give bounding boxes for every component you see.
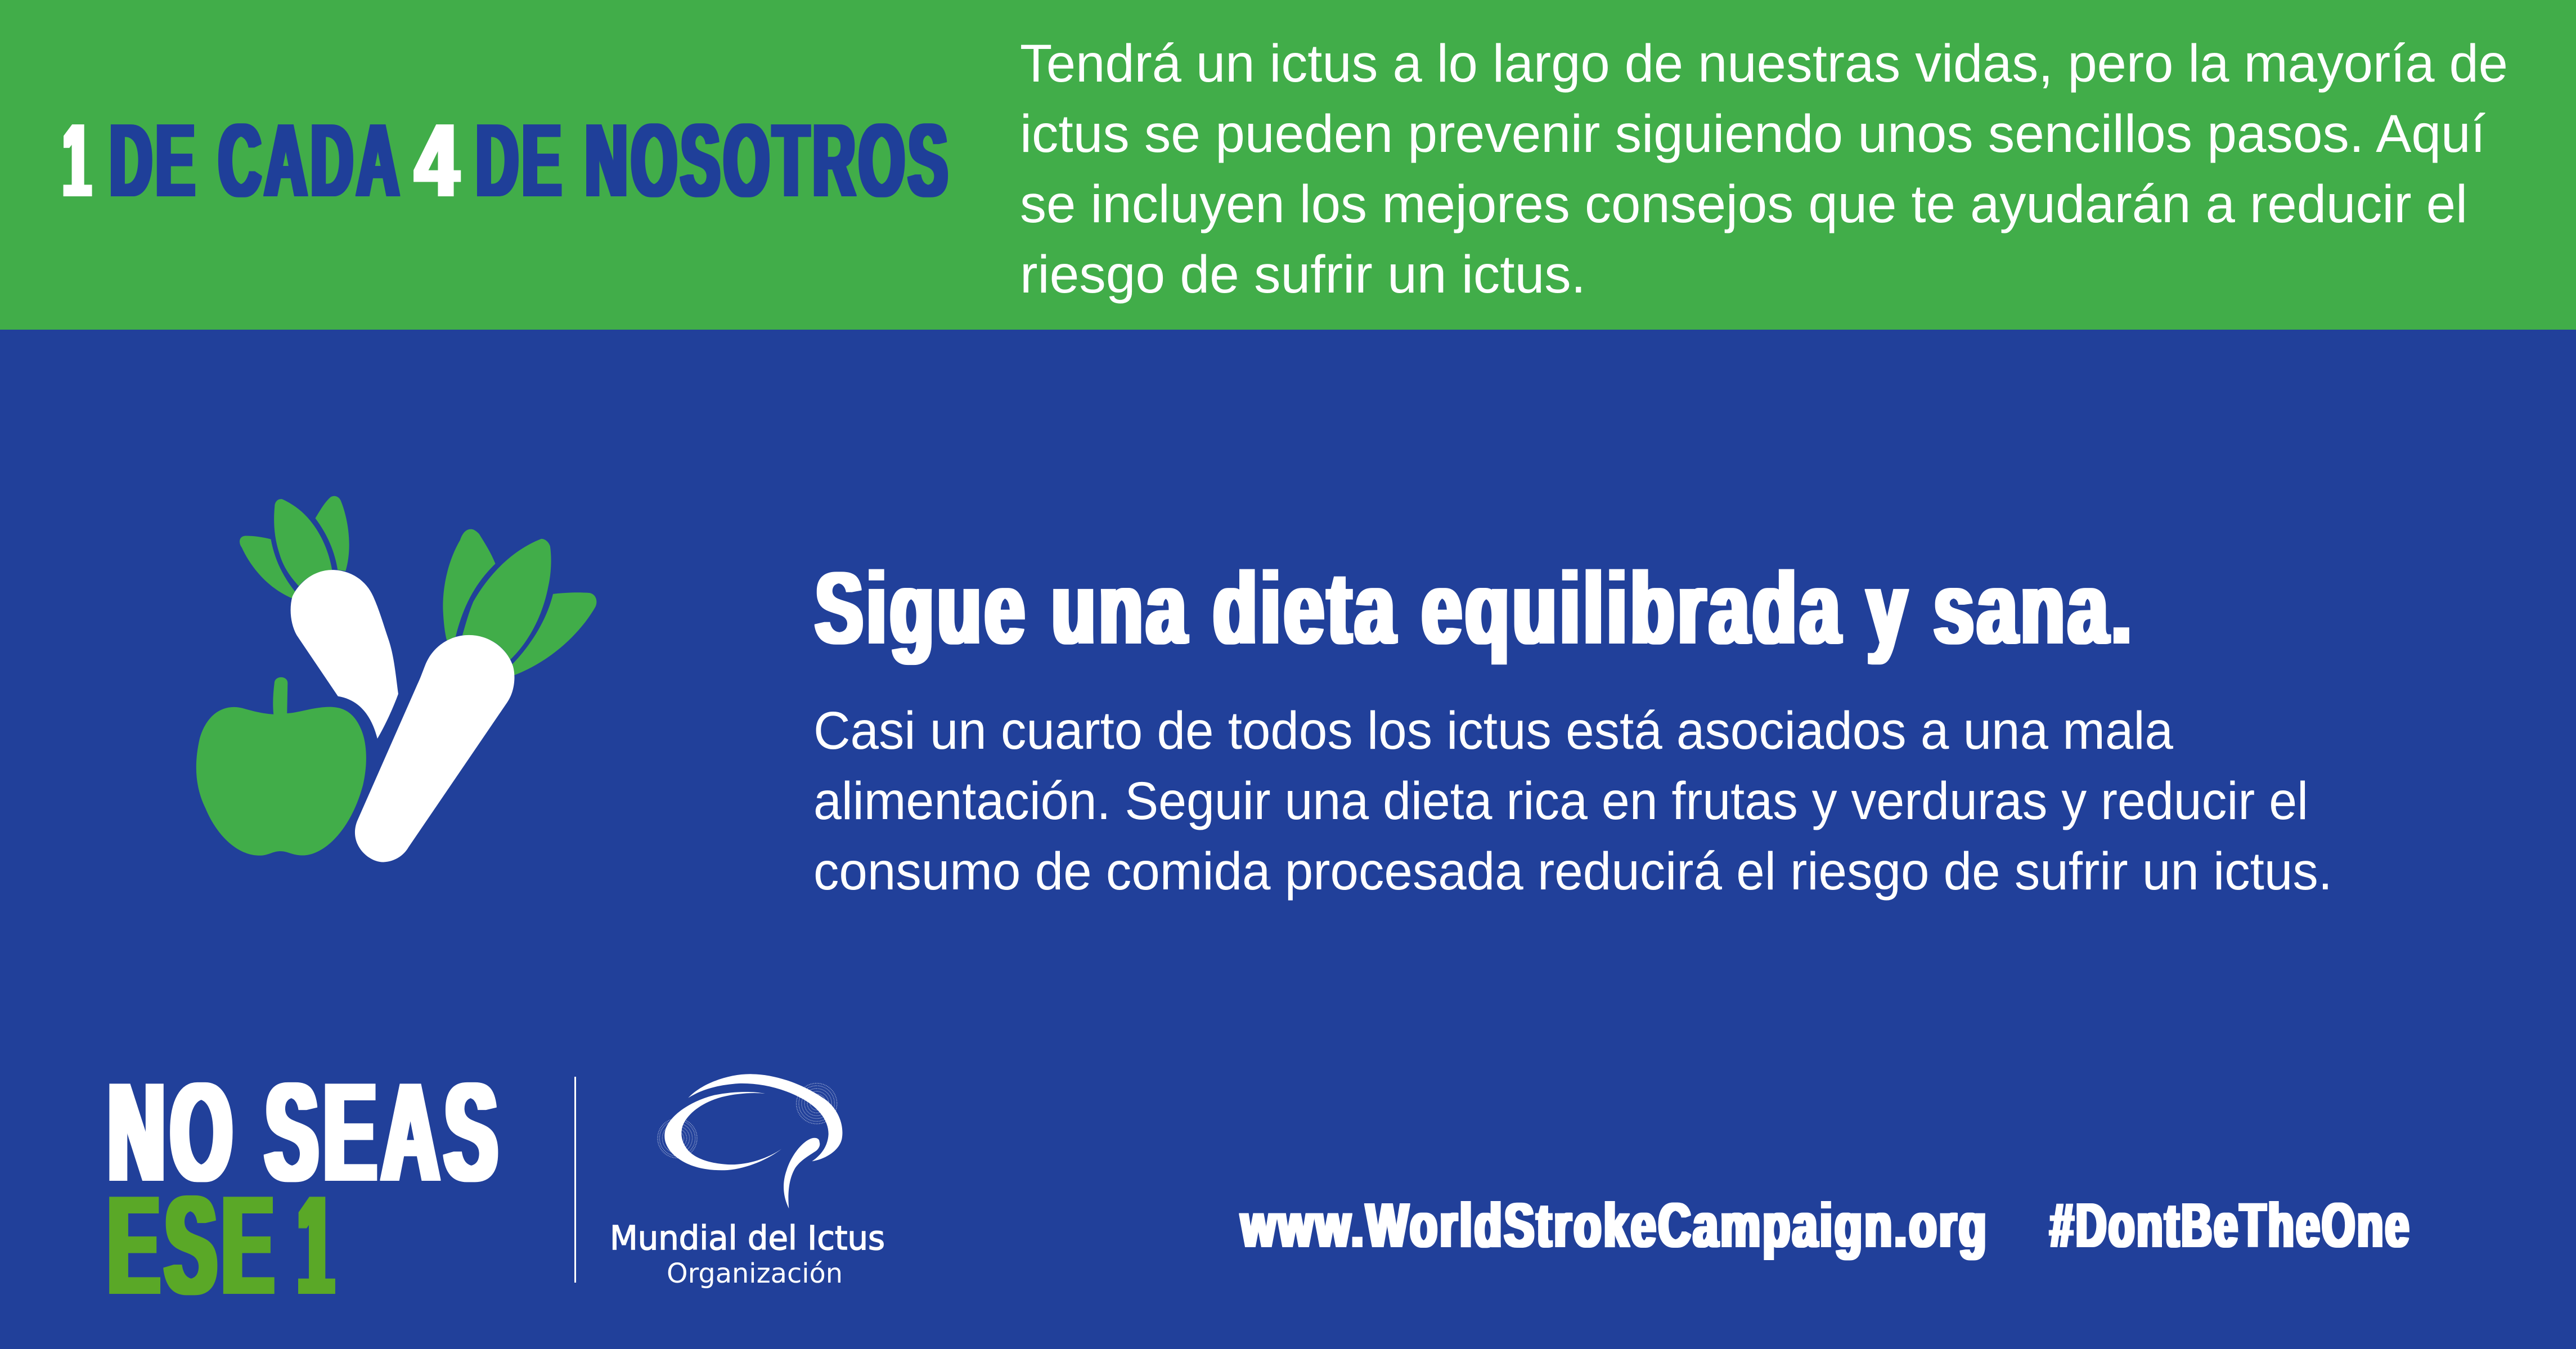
icon: small white carrot bbox=[291, 570, 398, 739]
intro text block: se incluyen los mejores consejos que te ayudarán a reducir el bbox=[1020, 174, 2467, 234]
campaign website url: www.WorldStrokeCampaign.org bbox=[1240, 1191, 1989, 1260]
campaign logo: no seas ese 1: ESE bbox=[108, 1167, 279, 1323]
organisation name: Mundial del Ictus bbox=[610, 1218, 885, 1257]
icon: apple and carrots bbox=[196, 496, 596, 862]
heading: 1 de cada 4 de nosotros: 1 bbox=[63, 102, 91, 218]
icon: brain swoosh bbox=[658, 1074, 842, 1208]
intro text block: ictus se pueden prevenir siguiendo unos sencillos pasos. Aquí bbox=[1020, 104, 2485, 164]
campaign logo: no seas ese 1: NO SEAS bbox=[108, 1054, 503, 1210]
intro text block: riesgo de sufrir un ictus. bbox=[1020, 245, 1586, 304]
heading: 1 de cada 4 de nosotros: DE NOSOTROS bbox=[476, 102, 951, 218]
icon: carrot leaves bbox=[240, 496, 596, 675]
organisation label: Organización bbox=[667, 1258, 843, 1289]
campaign logo: no seas ese 1: 1 bbox=[298, 1167, 333, 1323]
icon: apple bbox=[196, 677, 366, 856]
heading: 1 de cada 4 de nosotros bbox=[63, 102, 951, 218]
panel: green header band bbox=[0, 0, 2576, 330]
intro text block: Tendrá un ictus a lo largo de nuestras vidas, pero la mayoría de bbox=[1020, 34, 2508, 93]
body text block: consumo de comida procesada reducirá el riesgo de sufrir un ictus. bbox=[813, 842, 2332, 901]
campaign hashtag: #DontBeTheOne bbox=[2050, 1191, 2411, 1260]
logo: world stroke organization bbox=[610, 1074, 885, 1289]
body text block: Casi un cuarto de todos los ictus está asociados a una mala bbox=[813, 701, 2173, 761]
intro text block bbox=[1020, 34, 2508, 304]
body text block bbox=[813, 701, 2332, 901]
icon: large white carrot bbox=[355, 635, 514, 862]
heading: 1 de cada 4 de nosotros: DE CADA bbox=[110, 102, 403, 218]
campaign logo: no seas ese 1 bbox=[108, 1054, 503, 1323]
divider line bbox=[574, 1077, 576, 1283]
body text block: alimentación. Seguir una dieta rica en frutas y verduras y reducir el bbox=[813, 771, 2308, 831]
heading: 1 de cada 4 de nosotros: 4 bbox=[415, 102, 458, 218]
